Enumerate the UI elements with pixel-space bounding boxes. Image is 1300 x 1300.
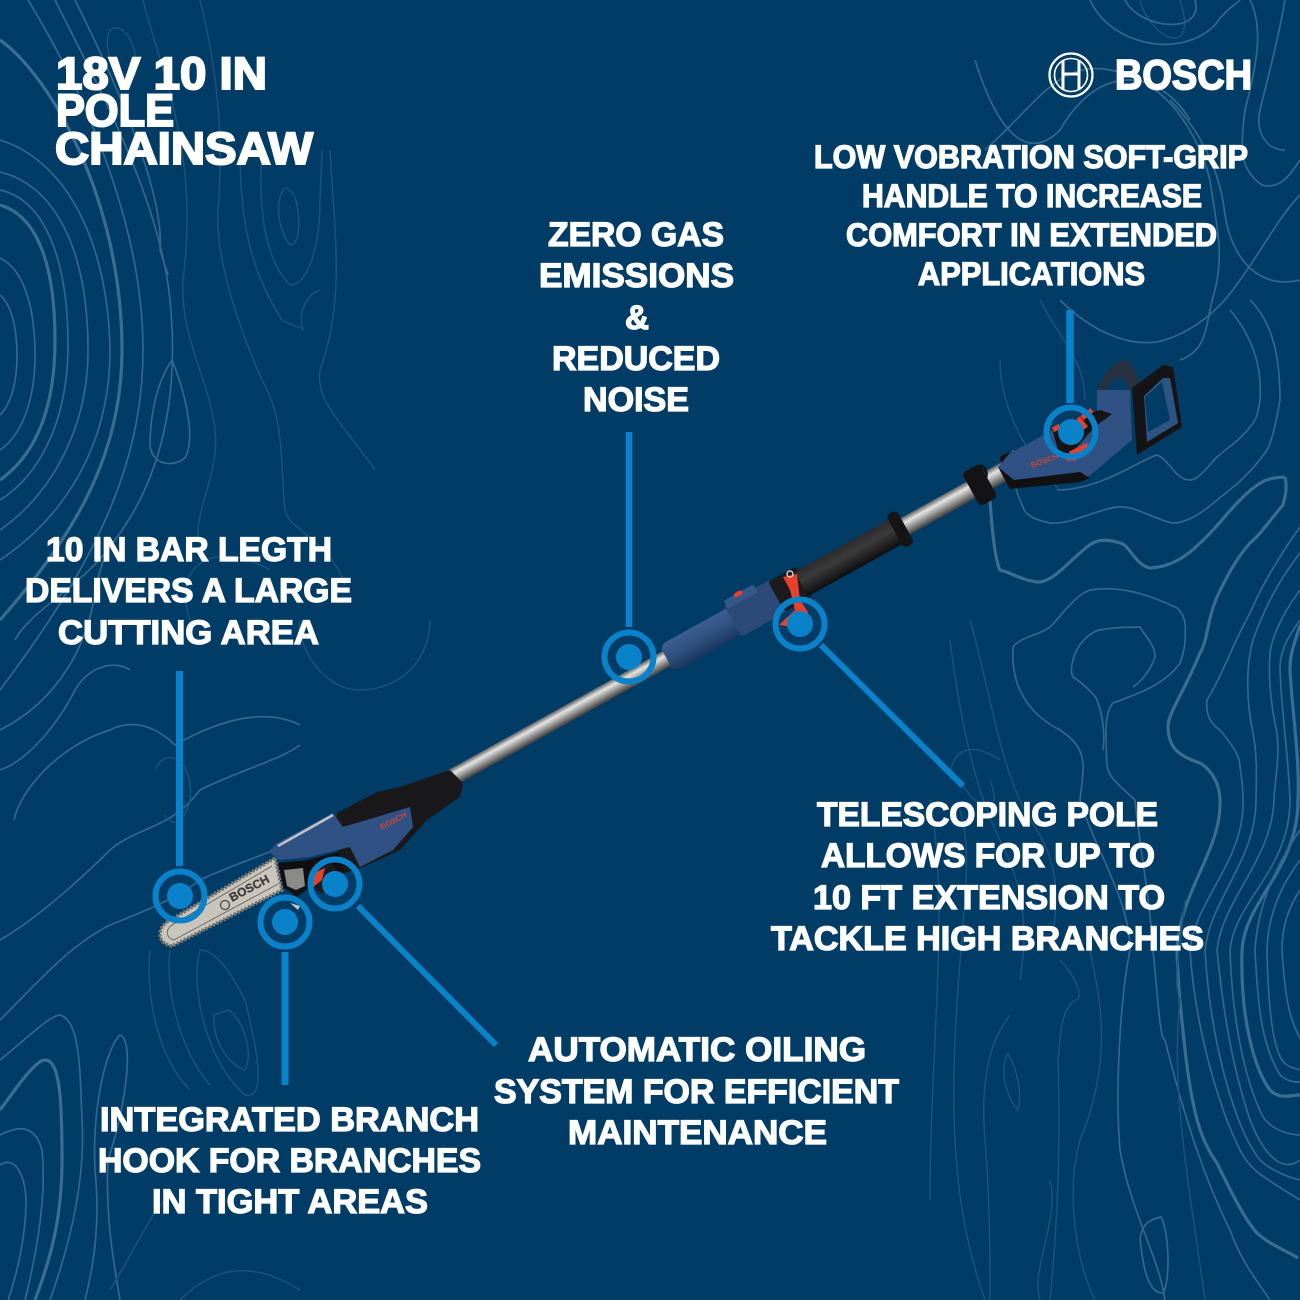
saw head housing: BOSCH <box>379 810 409 832</box>
callout text: soft-grip handle: COMFORT IN EXTENDED <box>846 217 1217 253</box>
callout text: zero gas emissions: ZERO GAS <box>548 216 724 254</box>
callout text: zero gas emissions: & <box>625 299 649 337</box>
title <box>55 48 314 174</box>
callout text: bar length <box>25 531 352 652</box>
marker: handle <box>1046 408 1096 456</box>
red clamp <box>779 574 808 628</box>
pole chainsaw product illustration: BOSCH <box>1030 451 1060 470</box>
icon: Bosch logo and wordmark: BOSCH <box>1115 51 1252 98</box>
callout text: telescoping pole: TACKLE HIGH BRANCHES <box>771 920 1204 958</box>
red motor details <box>1052 410 1112 458</box>
leader: emissions <box>626 432 632 627</box>
callout text: bar length: DELIVERS A LARGE <box>25 572 352 610</box>
callout text: telescoping pole: TELESCOPING POLE <box>817 796 1158 834</box>
leader: telescoping <box>821 645 963 786</box>
callout text: automatic oiling: SYSTEM FOR EFFICIENT <box>494 1073 899 1111</box>
callout text: branch hook: HOOK FOR BRANCHES <box>98 1142 481 1180</box>
leader: hook <box>282 952 288 1085</box>
icon: rear handle <box>1097 360 1182 455</box>
title: 18V 10 IN <box>56 48 267 99</box>
callout text: automatic oiling: AUTOMATIC OILING <box>528 1031 866 1069</box>
callout text: soft-grip handle: LOW VOBRATION SOFT-GRIP <box>814 139 1248 175</box>
leader: oiling <box>358 906 496 1045</box>
motor housing <box>998 390 1132 487</box>
saw bar and chain <box>160 858 282 946</box>
callout text: soft-grip handle: APPLICATIONS <box>918 256 1145 292</box>
callout text: telescoping pole: ALLOWS FOR UP TO <box>821 837 1155 875</box>
callout text: zero gas emissions: EMISSIONS <box>539 257 734 295</box>
callout text: bar length: CUTTING AREA <box>58 614 319 652</box>
saw bar and chain: BOSCH <box>227 872 272 905</box>
callout text: automatic oiling <box>494 1031 899 1152</box>
marker: oiling <box>310 860 360 908</box>
callout text: automatic oiling: MAINTENANCE <box>568 1114 827 1152</box>
callout text: branch hook <box>98 1101 481 1221</box>
marker: emissions <box>604 632 654 682</box>
callout text: soft-grip handle <box>814 139 1248 292</box>
telescoping pole shaft <box>440 443 1026 795</box>
callout text: zero gas emissions: NOISE <box>583 381 689 419</box>
marker: bar <box>156 872 204 920</box>
callout text: telescoping pole <box>771 796 1204 958</box>
callout text: branch hook: INTEGRATED BRANCH <box>100 1101 479 1139</box>
pole chainsaw product illustration <box>160 360 1182 946</box>
icon: Bosch logo and wordmark <box>1050 51 1252 98</box>
callout text: soft-grip handle: HANDLE TO INCREASE <box>862 178 1202 214</box>
title: CHAINSAW <box>55 123 314 174</box>
marker: telescoping <box>776 600 824 648</box>
marker: hook <box>260 898 310 946</box>
callout text: zero gas emissions <box>539 216 734 419</box>
leader: handle <box>1066 310 1074 403</box>
saw head housing <box>270 770 463 910</box>
leader: bar <box>176 671 183 866</box>
title: POLE <box>56 85 174 136</box>
callout text: bar length: 10 IN BAR LEGTH <box>46 531 332 569</box>
callout text: telescoping pole: 10 FT EXTENSION TO <box>813 879 1165 917</box>
callout text: zero gas emissions: REDUCED <box>552 340 720 378</box>
callout text: branch hook: IN TIGHT AREAS <box>152 1183 428 1221</box>
